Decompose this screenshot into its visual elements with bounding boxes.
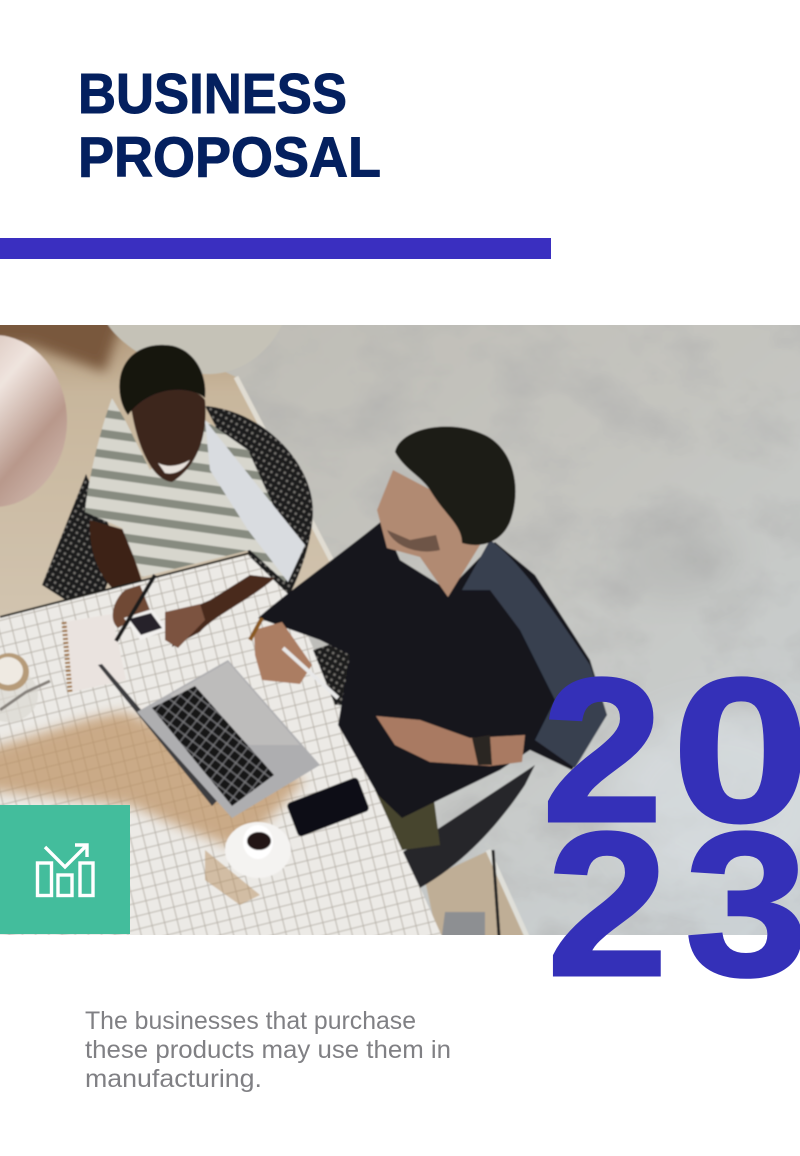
- denim shoulder: [462, 540, 607, 768]
- man: [250, 427, 607, 850]
- title: PROPOSAL: [78, 126, 381, 190]
- title: [78, 62, 381, 190]
- mosaic table: [0, 553, 448, 950]
- sweater: [258, 520, 607, 818]
- hair: [119, 345, 205, 415]
- description text: these products may use them in: [85, 1036, 451, 1064]
- espresso cup: [225, 822, 291, 878]
- hair: [395, 427, 516, 545]
- trousers: [375, 790, 440, 851]
- number 2023: 2: [542, 636, 663, 865]
- number 2023: [542, 636, 800, 1019]
- man's chair: [313, 635, 535, 950]
- left hand with pen: [254, 622, 312, 684]
- face: [130, 387, 206, 482]
- wood floor: [0, 310, 535, 950]
- woman's hands and phone: [113, 575, 275, 648]
- round stool: [106, 325, 268, 374]
- notebook: [64, 614, 126, 692]
- black phone: [286, 777, 370, 837]
- woman: [85, 345, 305, 600]
- arm: [89, 520, 142, 588]
- pendant lamp: [0, 335, 67, 507]
- open hand and forearm: [376, 716, 525, 766]
- icon tile: green square with bar chart: [0, 805, 130, 934]
- concrete floor: [226, 325, 800, 935]
- woman's chair: [42, 406, 313, 603]
- description text: The businesses that purchase: [85, 1007, 416, 1035]
- striped shirt: [85, 398, 298, 582]
- icon: bar chart with rising arrow: [38, 845, 93, 896]
- number 2023: 2: [547, 790, 668, 1019]
- photo: two colleagues meeting at a mosaic table: [0, 310, 800, 950]
- laptop: [98, 660, 320, 818]
- accent bar: [0, 238, 551, 259]
- beard: [387, 530, 440, 552]
- description text: manufacturing.: [85, 1065, 262, 1093]
- description text: [85, 1007, 451, 1093]
- latte cup: [0, 653, 50, 722]
- towel: [205, 420, 305, 582]
- neck and face: [377, 470, 480, 597]
- title: BUSINESS: [78, 62, 347, 126]
